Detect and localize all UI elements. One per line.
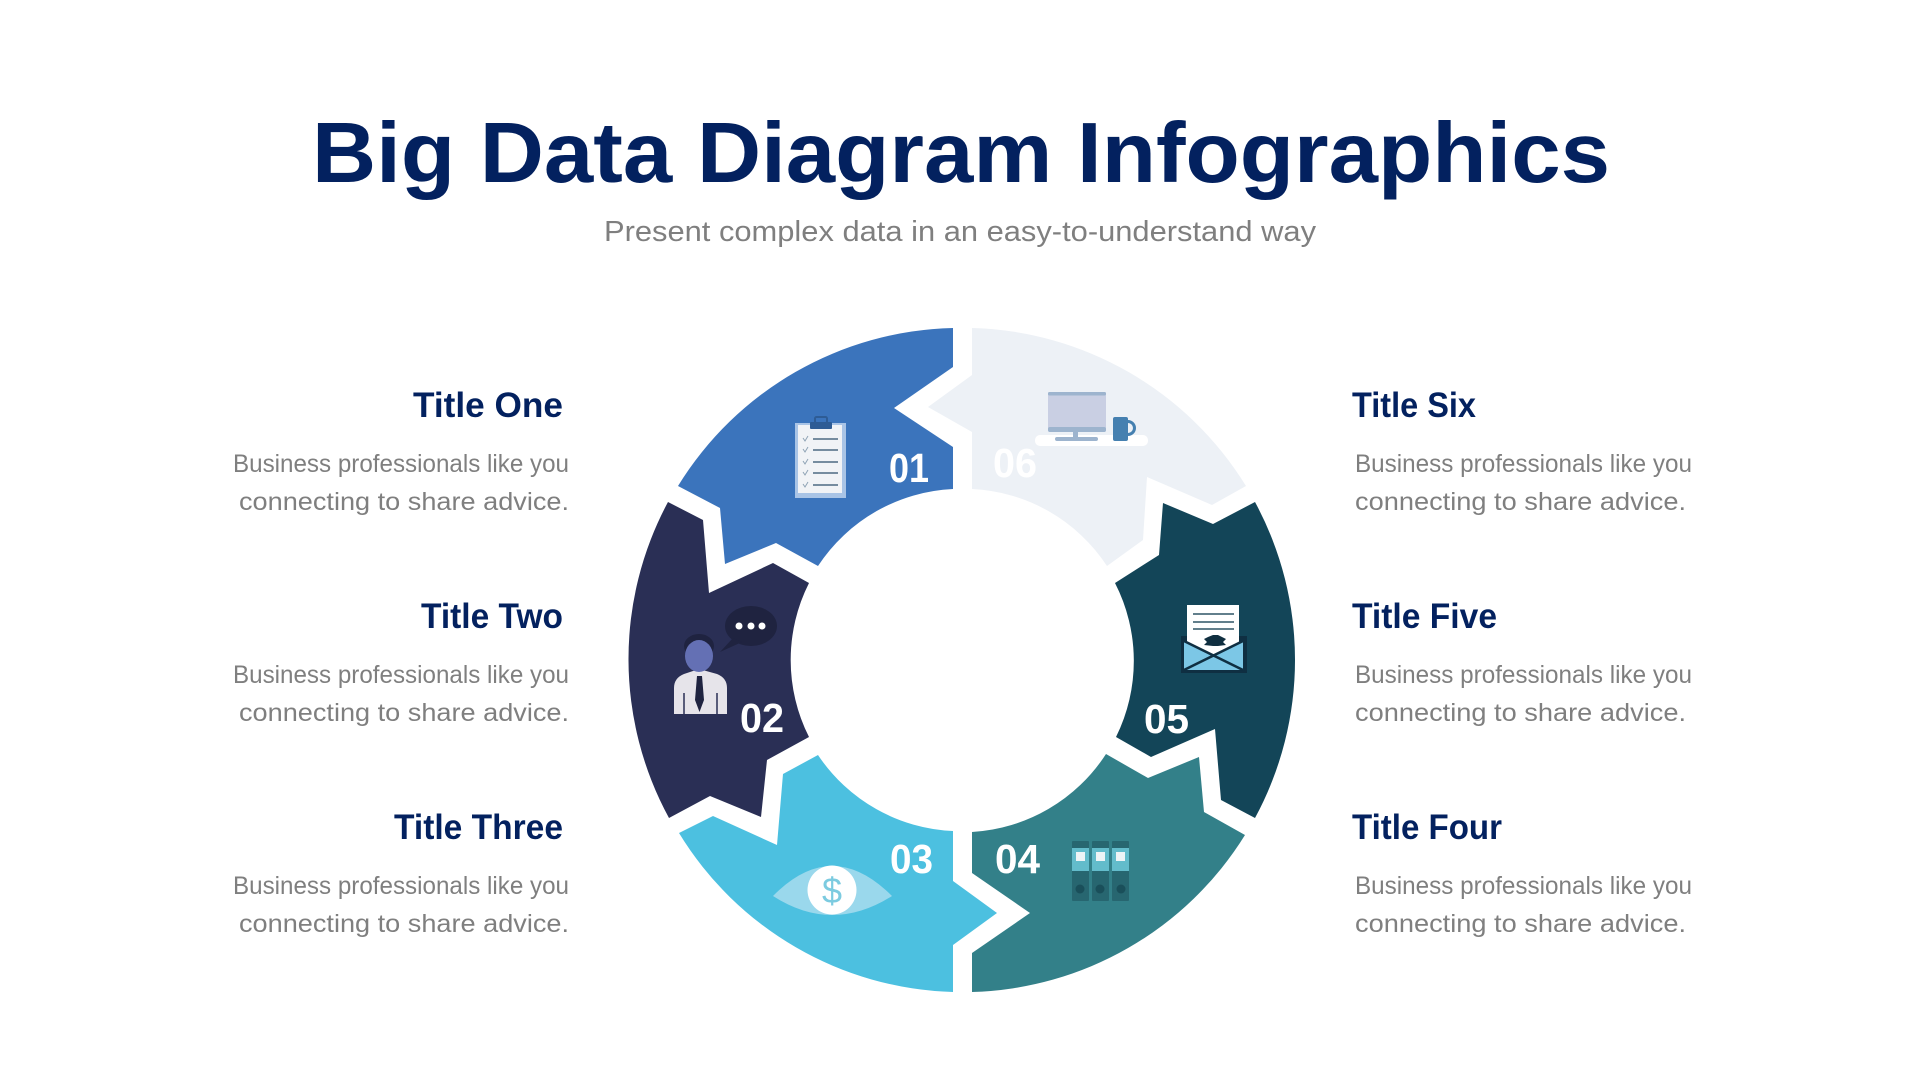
body text: title one: Business professionals like you <box>233 450 569 478</box>
title: Big Data Diagram Infographics <box>312 106 1610 201</box>
body text: title six: Business professionals like you <box>1355 450 1692 478</box>
body text: title two <box>233 661 569 727</box>
icon: open envelope with letter <box>1181 605 1247 673</box>
body text: title five: connecting to share advice. <box>1355 699 1686 727</box>
segment 05 <box>1115 502 1295 818</box>
body text: title four: connecting to share advice. <box>1355 910 1686 938</box>
heading: title three: Title Three <box>394 808 563 847</box>
icon: eye with dollar sign <box>773 866 892 915</box>
body text: title two: Business professionals like you <box>233 661 569 689</box>
body text: title three: Business professionals like you <box>233 872 569 900</box>
icon: businessman with speech bubble <box>674 606 777 714</box>
body text: title five: Business professionals like you <box>1355 661 1692 689</box>
segment 01 <box>678 328 953 566</box>
segment 03 <box>679 755 997 992</box>
icon: clipboard checklist <box>795 417 846 498</box>
panel: title one text <box>233 386 569 516</box>
number 06: 06 <box>993 440 1037 486</box>
body text: title three: connecting to share advice. <box>239 910 569 938</box>
segment 04 <box>972 754 1245 992</box>
heading: title four: Title Four <box>1352 808 1502 847</box>
body text: title one <box>233 450 569 516</box>
subtitle: Present complex data in an easy-to-understand way <box>604 216 1317 248</box>
heading: title one: Title One <box>413 386 563 425</box>
icon: three binders <box>1072 841 1129 901</box>
number 04: 04 <box>995 836 1040 882</box>
body text: title two: connecting to share advice. <box>239 699 569 727</box>
icon: eye with dollar sign: $ <box>822 870 842 911</box>
segment 06 <box>928 328 1246 566</box>
body text: title six <box>1355 450 1692 516</box>
body text: title four <box>1355 872 1692 938</box>
number 03: 03 <box>890 836 933 882</box>
number 01: 01 <box>889 445 929 491</box>
panel: title six text <box>1352 386 1692 516</box>
heading: title six: Title Six <box>1352 386 1476 425</box>
body text: title one: connecting to share advice. <box>239 488 569 516</box>
body text: title four: Business professionals like you <box>1355 872 1692 900</box>
icon: desktop computer and mug <box>1035 392 1148 446</box>
heading: title two: Title Two <box>421 597 563 636</box>
body text: title three <box>233 872 569 938</box>
panel: title three text <box>233 808 569 938</box>
body text: title six: connecting to share advice. <box>1355 488 1686 516</box>
panel: title two text <box>233 597 569 727</box>
panel: title four text <box>1352 808 1692 938</box>
heading: title five: Title Five <box>1352 597 1497 636</box>
body text: title five <box>1355 661 1692 727</box>
ring diagram <box>628 328 1295 992</box>
segment 02 <box>628 502 809 818</box>
number 02: 02 <box>740 695 784 741</box>
panel: title five text <box>1352 597 1692 727</box>
number 05: 05 <box>1144 696 1189 742</box>
